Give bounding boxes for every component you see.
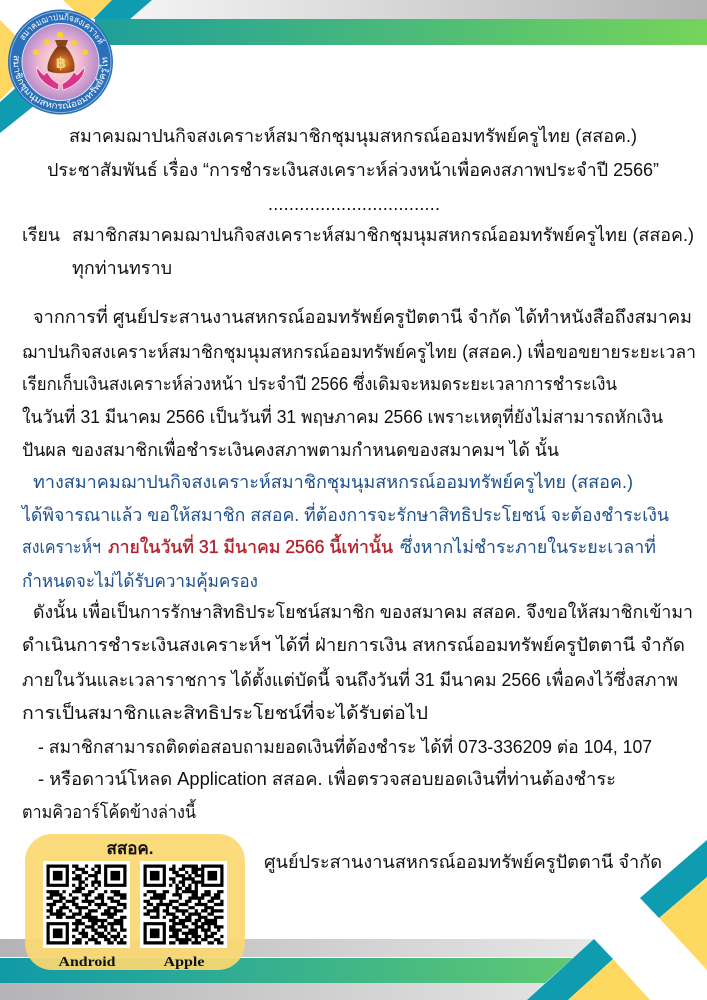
paragraph: background: จากการที่ ศูนย์ประสานงานสหกรณ์ออมทรัพย์ครูปัตตานี จำกัด ได้ทำหนังสือถึงสมาคม [33,304,692,328]
contact bullets [22,734,652,822]
paragraph: blue notice with red deadline: สงเคราะห์ฯ [22,537,101,557]
paragraph: instructions [22,599,693,723]
QR code: Apple [140,861,227,948]
QR code panel [25,834,245,970]
top header bars [95,0,707,45]
paragraph: instructions: ดังนั้น เพื่อเป็นการรักษาสิทธิประโยชน์สมาชิก ของสมาคม สสอค. จึงขอให้สมาชิกเข้ามา [33,599,693,622]
paragraph: blue notice with red deadline: ได้พิจารณาแล้ว ขอให้สมาชิก สสอค. ที่ต้องการจะรักษาสิทธิประโยชน์ จะต้องชำระเงิน [20,502,669,525]
salutation: ทุกท่านทราบ [72,258,172,279]
paragraph: background: ปันผล ของสมาชิกเพื่อชำระเงินคงสภาพตามกำหนดของสมาคมฯ ได้ นั้น [22,437,559,460]
contact bullets: - สมาชิกสามารถติดต่อสอบถามยอดเงินที่ต้องชำระ ได้ที่ 073-336209 ต่อ 104, 107 [38,734,652,757]
paragraph: blue notice with red deadline: ซึ่งหากไม่ชำระภายในระยะเวลาที่ [400,534,656,557]
paragraph: instructions: ภายในวันและเวลาราชการ ได้ตั้งแต่บัดนี้ จนถึงวันที่ 31 มีนาคม 2566 เพื่อคงไว้ซึ่งสภาพ [22,667,678,690]
heading [47,125,659,214]
logo: association seal [8,10,113,114]
top-left corner decoration [0,0,152,133]
bottom-right corner decoration [527,840,707,1000]
paragraph: background: เรียกเก็บเงินสงเคราะห์ล่วงหน้า ประจำปี 2566 ซึ่งเดิมจะหมดระยะเวลาการชำระเงิน [22,371,617,394]
logo money bag: ฿ [56,55,66,72]
paragraph: background: ในวันที่ 31 มีนาคม 2566 เป็นวันที่ 31 พฤษภาคม 2566 เพราะเหตุที่ยังไม่สามารถหักเงิน [22,404,663,428]
paragraph: blue notice with red deadline: กำหนดจะไม่ได้รับความคุ้มครอง [22,570,258,592]
salutation: เรียน [22,225,60,245]
logo top ring text: สมาคมฌาปนกิจสงเคราะห์ [20,13,106,44]
heading: สมาคมฌาปนกิจสงเคราะห์สมาชิกชุมนุมสหกรณ์ออมทรัพย์ครูไทย (สสอค.) [69,125,637,147]
salutation: สมาชิกสมาคมฌาปนกิจสงเคราะห์สมาชิกชุมนุมสหกรณ์ออมทรัพย์ครูไทย (สสอค.) [72,224,694,246]
paragraph: blue notice with red deadline: ภายในวันที่ 31 มีนาคม 2566 นี้เท่านั้น [108,534,393,557]
salutation [22,224,694,279]
logo stars [33,32,88,55]
label: Android: Android [58,955,116,970]
label: Apple: Apple [164,955,204,970]
contact bullets: - หรือดาวน์โหลด Application สสอค. เพื่อตรวจสอบยอดเงินที่ท่านต้องชำระ [38,766,616,789]
paragraph: blue notice with red deadline: ทางสมาคมฌาปนกิจสงเคราะห์สมาชิกชุมนุมสหกรณ์ออมทรัพย์ครูไทย (สสอค.) [33,471,633,493]
heading: ................................. [268,194,440,214]
signature: ศูนย์ประสานงานสหกรณ์ออมทรัพย์ครูปัตตานี จำกัด [264,852,662,873]
heading: ประชาสัมพันธ์ เรื่อง “การชำระเงินสงเคราะห์ล่วงหน้าเพื่อคงสภาพประจำปี 2566” [47,157,659,180]
paragraph: background: ฌาปนกิจสงเคราะห์สมาชิกชุมนุมสหกรณ์ออมทรัพย์ครูไทย (สสอค.) เพื่อขอขยายระยะเวลา [22,339,696,363]
paragraph: instructions: ดำเนินการชำระเงินสงเคราะห์ฯ ได้ที่ ฝ่ายการเงิน สหกรณ์ออมทรัพย์ครูปัตตานี จำกัด [22,632,685,656]
paragraph: background [22,304,696,460]
contact bullets: ตามคิวอาร์โค้ดข้างล่างนี้ [22,799,196,822]
bottom footer bars [0,939,594,1000]
paragraph: instructions: การเป็นสมาชิกและสิทธิประโยชน์ที่จะได้รับต่อไป [22,700,428,723]
QR panel title: สสอค. [106,839,154,858]
QR code: Android [43,861,130,948]
logo hands [37,67,84,90]
paragraph: blue notice with red deadline [20,471,669,592]
